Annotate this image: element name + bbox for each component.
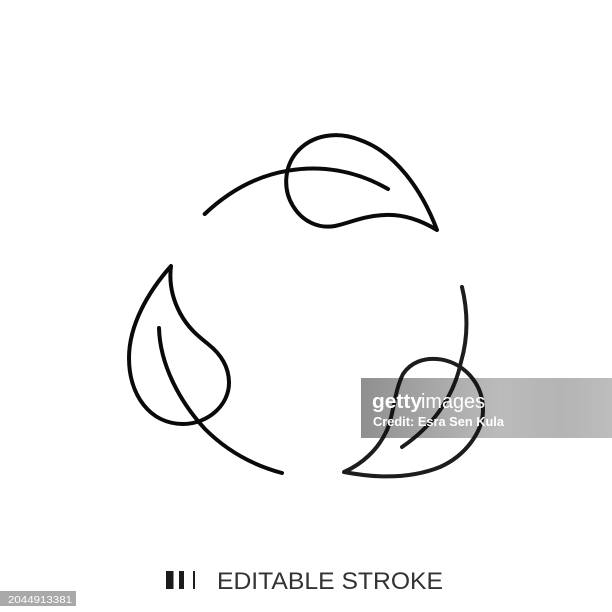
image id label <box>0 591 76 606</box>
watermark text: gettyimages: getty <box>372 391 423 413</box>
icon: stroke weight bars <box>166 571 195 589</box>
watermark text: gettyimages: images <box>421 391 485 413</box>
caption: editable stroke: EDITABLE STROKE <box>217 568 443 595</box>
watermark text: credit: Credit: Esra Sen Kula <box>373 415 505 429</box>
watermark banner <box>361 378 612 438</box>
watermark text: gettyimages <box>372 391 485 413</box>
image id label: 2044913381 <box>8 594 72 606</box>
icon: left leaf with curved stem <box>129 266 282 473</box>
icon: bottom leaf with curved stem <box>344 287 483 476</box>
icon: top leaf with curved stem <box>205 135 437 230</box>
